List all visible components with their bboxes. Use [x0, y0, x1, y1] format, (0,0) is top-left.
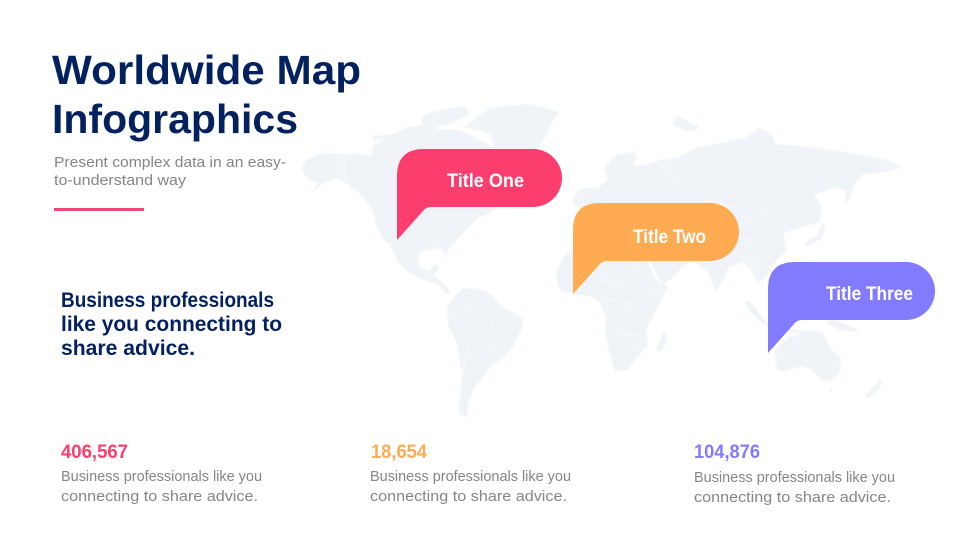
orange speech bubble: Title Two	[573, 203, 739, 294]
stat: 406,567: connecting to share advice.	[61, 488, 258, 505]
key message: share advice.	[61, 337, 195, 360]
stat: 406,567	[61, 442, 262, 505]
key message: Business professionals	[61, 289, 274, 312]
title: Worldwide Map	[52, 47, 361, 93]
key message	[61, 289, 282, 360]
pink speech bubble: Title One	[397, 149, 562, 240]
title: Infographics	[52, 96, 298, 142]
stat: 406,567: 406,567	[61, 442, 128, 463]
stat: 406,567: Business professionals like you	[61, 468, 262, 485]
stat: 18,654: connecting to share advice.	[370, 488, 567, 505]
stat: 104,876: 104,876	[694, 442, 760, 463]
stat: 104,876: Business professionals like you	[694, 469, 895, 486]
purple speech bubble: Title Three: Title Three	[826, 284, 913, 305]
stat: 18,654: Business professionals like you	[370, 468, 571, 485]
stat: 104,876	[694, 442, 895, 506]
orange speech bubble: Title Two: Title Two	[633, 227, 706, 248]
accent line	[54, 208, 144, 211]
stat: 18,654: 18,654	[371, 442, 427, 463]
stat: 18,654	[370, 442, 571, 505]
purple speech bubble: Title Three	[768, 262, 935, 353]
key message: like you connecting to	[61, 313, 282, 336]
world map background	[302, 104, 902, 417]
subtitle: Present complex data in an easy-	[54, 154, 286, 171]
subtitle	[54, 154, 286, 189]
subtitle: to-understand way	[54, 172, 187, 189]
pink speech bubble: Title One: Title One	[447, 171, 524, 192]
stat: 104,876: connecting to share advice.	[694, 489, 891, 506]
title	[52, 47, 361, 142]
